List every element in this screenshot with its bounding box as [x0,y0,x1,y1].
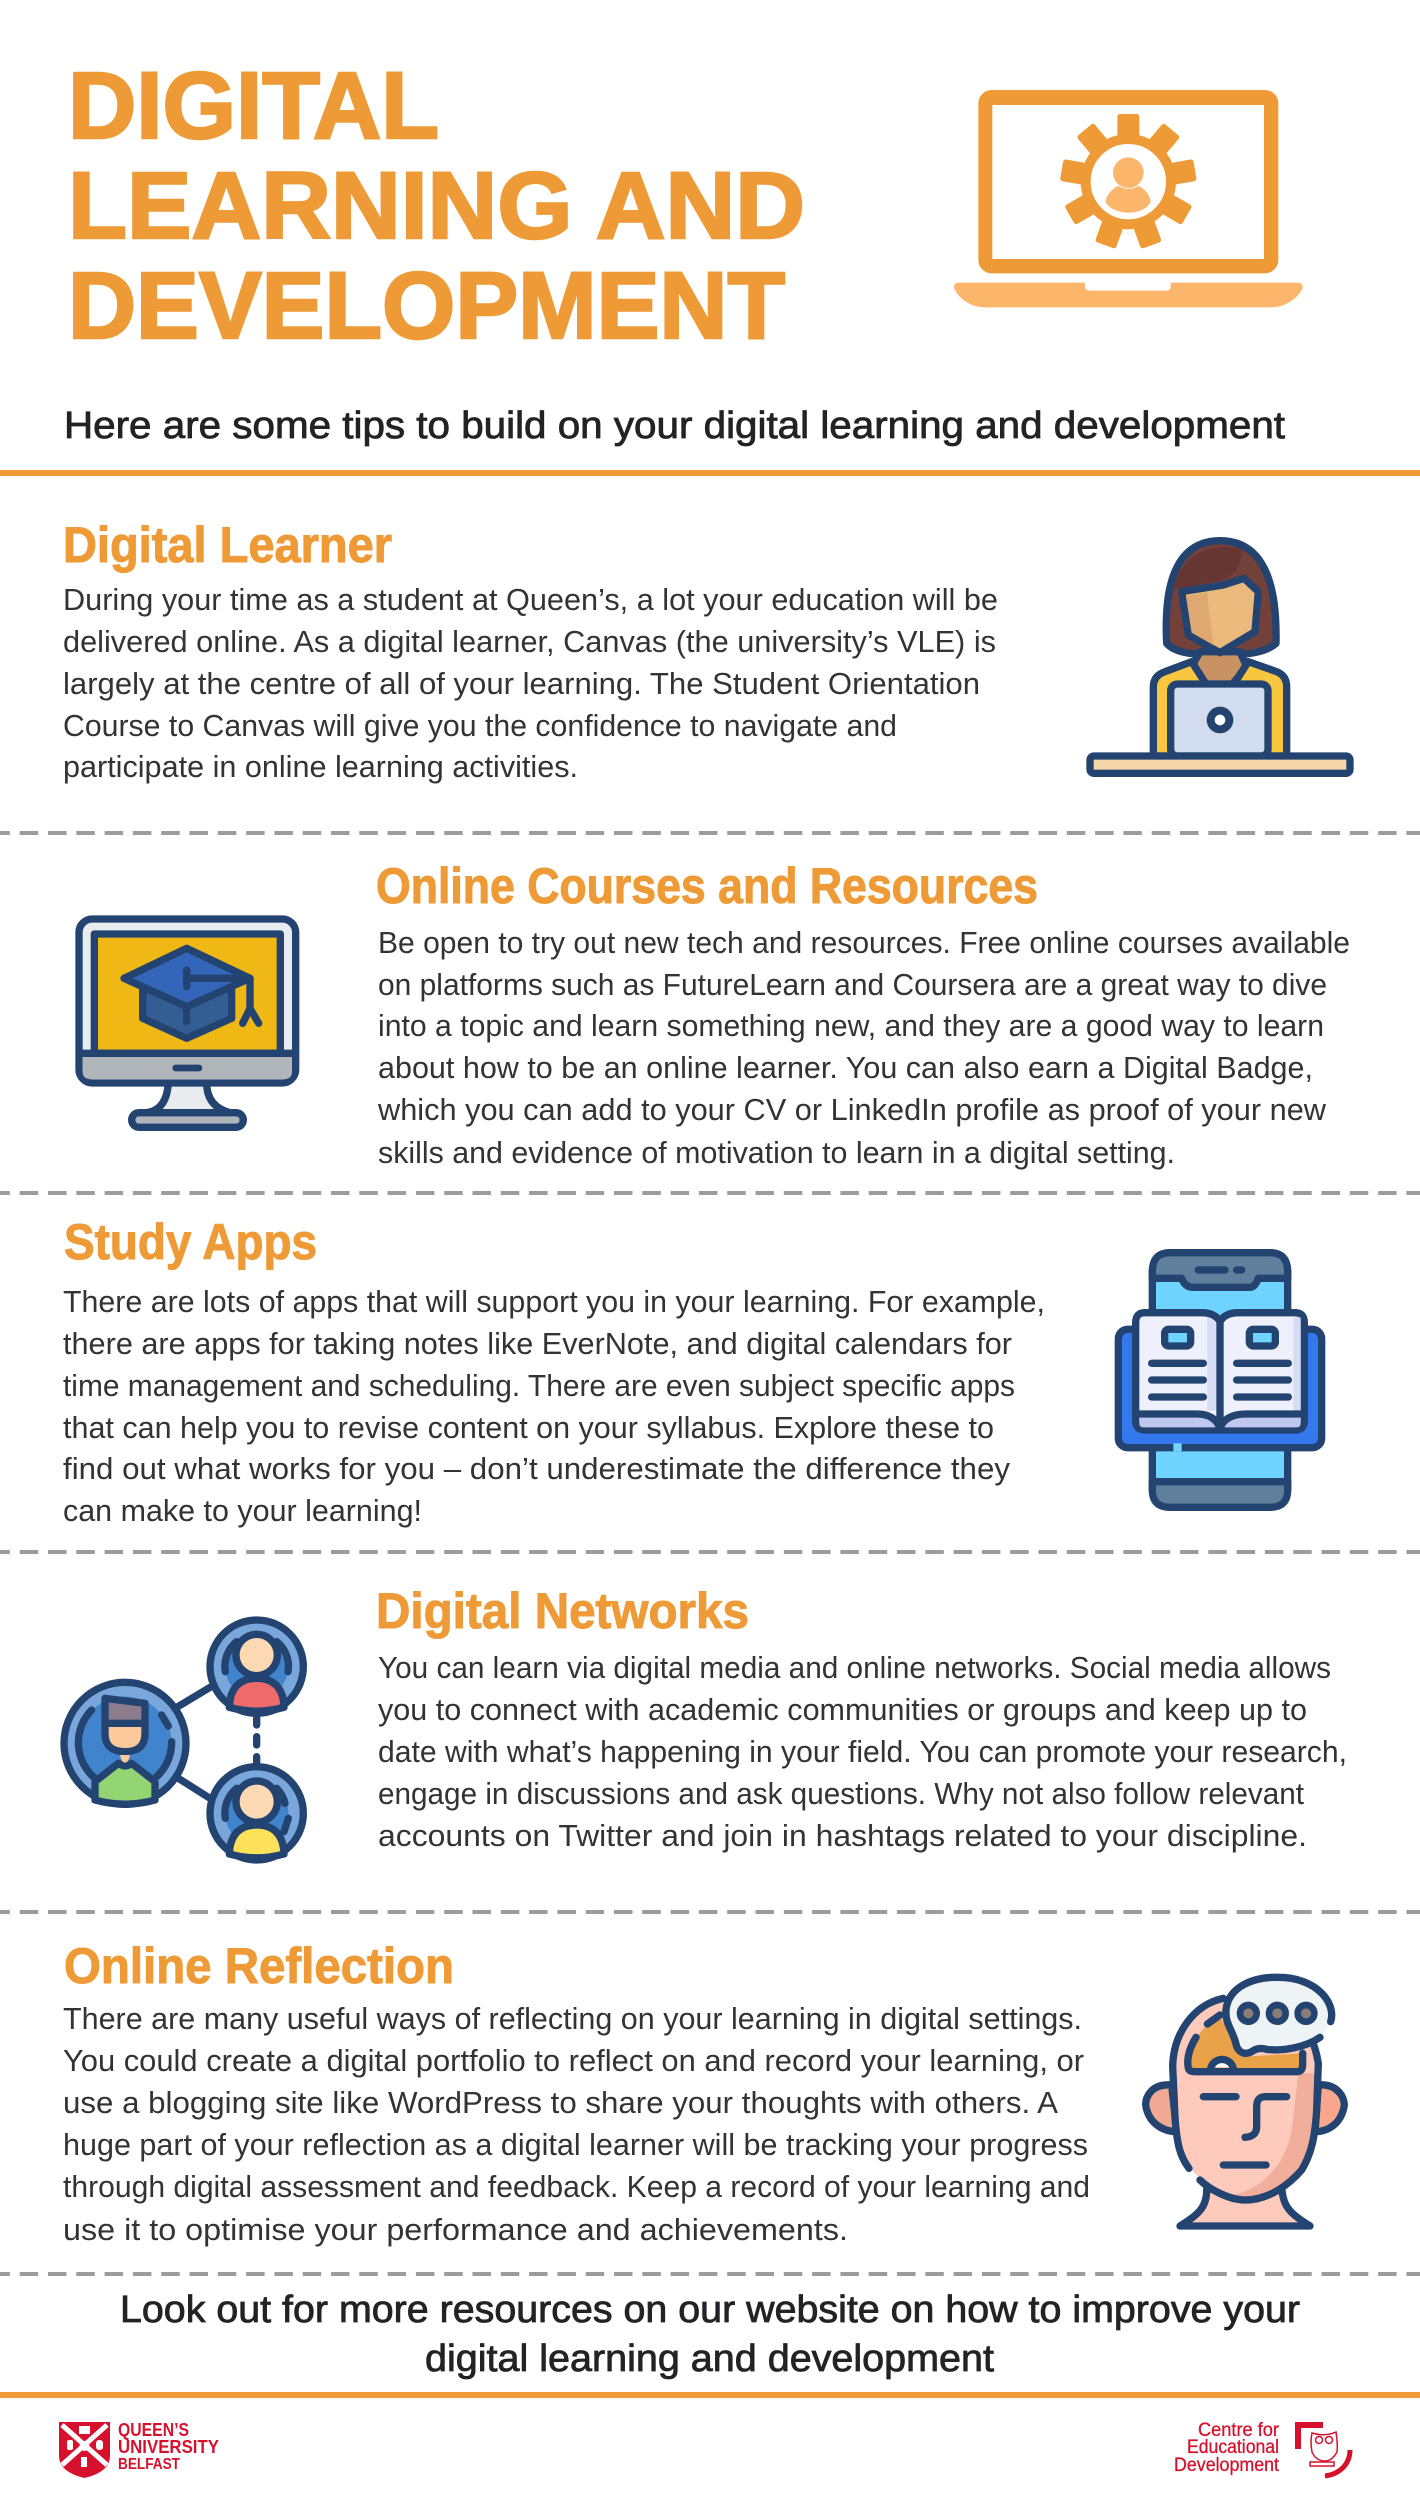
icon: laptop with gear [954,90,1303,307]
closing call to action: digital learning and development [425,2338,994,2380]
panel: online courses [79,858,1350,1170]
text block: online reflection: There are many useful ways of reflecting on your learning in digital settings. [63,2001,1082,2036]
text block: study apps [63,1284,1045,1528]
logo: centre for educational development: Centre for [1198,2420,1280,2441]
title: DIGITAL [68,53,439,159]
text block: digital learner [63,582,998,784]
text block: digital networks: you to connect with academic communities or groups and keep up to [378,1692,1307,1727]
text block: digital networks [378,1650,1347,1853]
text block: digital learner: During your time as a student at Queen’s, a lot your education will be [63,582,998,617]
text block: digital learner: delivered online. As a digital learner, Canvas (the university’s VLE) is [63,624,996,659]
text block: online courses: Be open to try out new tech and resources. Free online courses available [378,925,1350,960]
text block: online courses: skills and evidence of motivation to learn in a digital setting. [378,1135,1175,1170]
logo: centre for educational development: Development [1174,2455,1280,2476]
text block: online reflection [63,2001,1090,2247]
text block: online courses: into a topic and learn something new, and they are a good way to learn [378,1008,1324,1043]
text block: study apps: find out what works for you – don’t underestimate the difference they [63,1451,1010,1486]
text block: study apps: there are apps for taking notes like EverNote, and digital calendars for [63,1326,1012,1361]
logo: queen's university belfast: UNIVERSITY [118,2437,219,2457]
title: LEARNING AND [68,153,805,259]
text block: online reflection: through digital assessment and feedback. Keep a record of your learning and [63,2169,1090,2204]
text block: online courses: which you can add to your CV or LinkedIn profile as proof of your new [377,1092,1327,1127]
icon: head with speech bubble [1146,1977,1344,2226]
logo: centre for educational development [1174,2420,1350,2476]
heading: digital networks: Digital Networks [376,1583,749,1639]
text block: study apps: can make to your learning! [63,1493,422,1528]
text block: study apps: that can help you to revise content on your syllabus. Explore these to [63,1410,994,1445]
icon: connected people network [64,1620,303,1860]
divider [0,1910,1420,1914]
text block: digital learner: Course to Canvas will give you the confidence to navigate and [63,708,897,743]
divider [0,1550,1420,1554]
heading: online courses: Online Courses and Resources [376,858,1038,914]
text block: online courses: about how to be an online learner. You can also earn a Digital Badge, [378,1050,1313,1085]
panel: study apps [63,1214,1322,1528]
logo: queen's university belfast [59,2420,219,2478]
text block: online reflection: use it to optimise your performance and achievements. [63,2212,848,2247]
logo: queen's university belfast: BELFAST [118,2456,180,2473]
panel: digital networks [64,1583,1347,1860]
panel: digital learner [63,517,1350,784]
text block: study apps: There are lots of apps that will support you in your learning. For example, [63,1284,1045,1319]
text block: online courses: on platforms such as FutureLearn and Coursera are a great way to dive [378,967,1327,1002]
divider [0,831,1420,835]
heading: digital learner: Digital Learner [63,517,392,573]
logo: centre for educational development: Educational [1187,2437,1279,2458]
icon: monitor with graduation cap [79,919,296,1127]
subtitle: Here are some tips to build on your digital learning and development [64,405,1285,447]
title: DEVELOPMENT [68,253,785,359]
title [68,53,805,359]
text block: online reflection: You could create a digital portfolio to reflect on and record your learning, or [63,2043,1084,2078]
text block: online reflection: use a blogging site like WordPress to share your thoughts with others. A [63,2085,1058,2120]
text block: online reflection: huge part of your reflection as a digital learner will be tracking your progress [63,2127,1088,2162]
text block: digital networks: You can learn via digital media and online networks. Social media allows [378,1650,1331,1685]
closing call to action [120,2289,1300,2380]
text block: study apps: time management and scheduling. There are even subject specific apps [63,1368,1015,1403]
closing call to action: Look out for more resources on our website on how to improve your [120,2289,1300,2331]
text block: online courses [377,925,1350,1170]
text block: digital learner: largely at the centre of all of your learning. The Student Orientation [63,666,980,701]
divider [0,1191,1420,1195]
heading: online reflection: Online Reflection [64,1938,454,1994]
panel: online reflection [63,1938,1344,2247]
text block: digital networks: date with what’s happening in your field. You can promote your research, [378,1734,1347,1769]
logo: queen's university belfast: QUEEN’S [118,2420,189,2440]
text block: digital networks: engage in discussions and ask questions. Why not also follow relevant [378,1776,1304,1811]
icon: phone with open book [1118,1253,1322,1507]
heading: study apps: Study Apps [64,1214,317,1270]
icon: woman at laptop [1090,541,1350,773]
text block: digital networks: accounts on Twitter and join in hashtags related to your discipline. [378,1818,1307,1853]
divider [0,2272,1420,2276]
text block: digital learner: participate in online learning activities. [63,749,578,784]
